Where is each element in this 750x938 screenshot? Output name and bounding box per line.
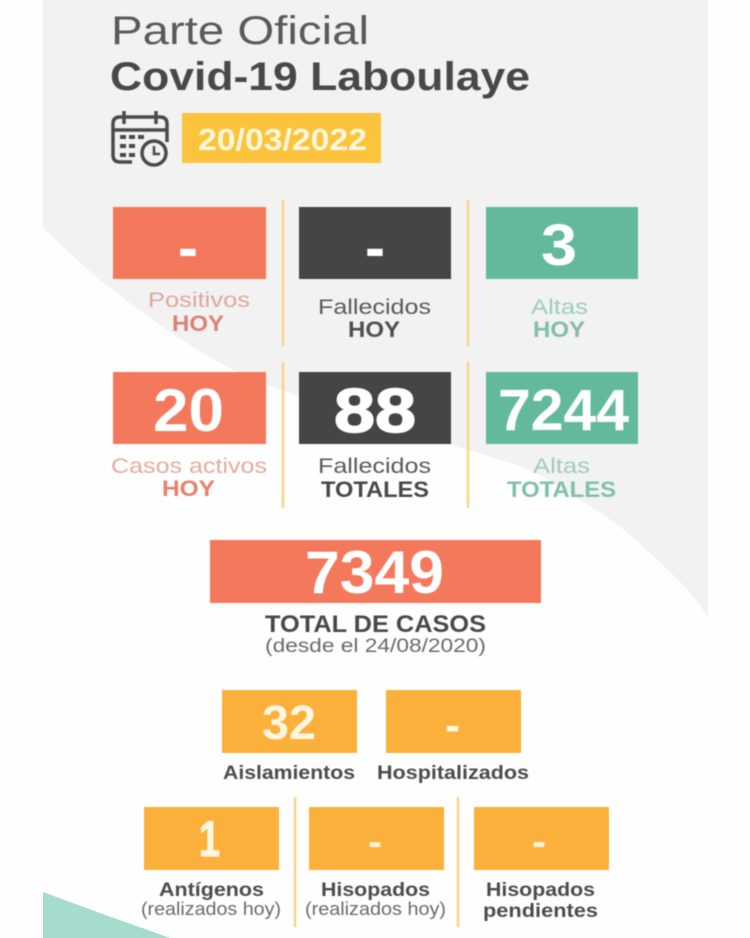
stat: Fallecidos hoy: Fallecidos — [318, 296, 431, 319]
stat: Positivos hoy — [113, 207, 266, 336]
stat: Positivos hoy: HOY — [172, 311, 224, 336]
stat: Altas hoy: Altas — [531, 296, 588, 319]
stat: Fallecidos hoy — [299, 207, 451, 342]
stat: Fallecidos totales: TOTALES — [321, 477, 429, 502]
header — [110, 9, 530, 165]
separators row 1 and 2 — [283, 200, 468, 927]
stat: Antígenos: (realizados hoy) — [141, 899, 281, 919]
stat: Aislamientos: Aislamientos — [223, 763, 355, 784]
stat: Casos activos hoy — [111, 372, 267, 501]
stat: Antígenos: 1 — [199, 811, 220, 867]
title line: Parte Oficial: Parte Oficial — [111, 9, 369, 53]
stat: Total de casos: TOTAL DE CASOS — [265, 611, 486, 638]
stat: Hisopados pendientes: Hisopados — [486, 880, 595, 901]
stat: Hisopados realizados: - — [368, 820, 382, 864]
stat: Hospitalizados — [377, 690, 529, 784]
stat: Altas totales: Altas — [533, 455, 590, 478]
stat: Altas totales: TOTALES — [507, 477, 616, 502]
stat: Fallecidos hoy: HOY — [348, 317, 400, 342]
stat: Antígenos: Antígenos — [159, 880, 264, 901]
stat: Fallecidos totales: 88 — [334, 377, 416, 446]
stat: Fallecidos totales — [299, 372, 451, 502]
stat: Hisopados pendientes: - — [532, 820, 546, 864]
stat: Hisopados realizados — [305, 807, 446, 919]
stat: Casos activos hoy: Casos activos — [111, 455, 267, 478]
stat: Hospitalizados: Hospitalizados — [377, 763, 529, 784]
stat: Hisopados pendientes: pendientes — [483, 901, 598, 922]
decorative teal corner shape — [43, 892, 170, 938]
stat: Hisopados pendientes — [474, 807, 609, 922]
stat: Altas totales — [486, 372, 638, 502]
stat: Altas hoy — [486, 207, 638, 342]
date badge — [182, 113, 381, 163]
stat: Casos activos hoy: HOY — [162, 476, 215, 501]
date badge: 20/03/2022 — [198, 122, 367, 157]
stat: Altas hoy: 3 — [541, 213, 577, 278]
stat: Aislamientos: 32 — [262, 697, 316, 750]
stat: Fallecidos totales: Fallecidos — [318, 455, 431, 478]
stat: Total de casos — [210, 539, 541, 657]
stat: Altas hoy: HOY — [533, 317, 585, 342]
title line: Covid-19 Laboulaye: Covid-19 Laboulaye — [110, 55, 530, 99]
stat: Hisopados realizados: (realizados hoy) — [305, 899, 446, 919]
stat: Casos activos hoy: 20 — [153, 377, 224, 444]
stat: Antígenos — [141, 807, 281, 919]
icon: calendar with clock — [113, 111, 167, 165]
stat: Positivos hoy: Positivos — [148, 289, 250, 312]
stat: Positivos hoy: - — [178, 214, 198, 281]
stat: Total de casos: (desde el 24/08/2020) — [265, 636, 486, 657]
stat: Hospitalizados: - — [445, 699, 460, 751]
background panel: gray wave — [43, 0, 708, 618]
stat: Total de casos: 7349 — [305, 539, 444, 606]
stat: Hisopados realizados: Hisopados — [321, 880, 430, 901]
stat: Fallecidos hoy: - — [365, 214, 385, 281]
stat: Aislamientos — [222, 690, 357, 784]
stat: Altas totales: 7244 — [498, 378, 629, 443]
